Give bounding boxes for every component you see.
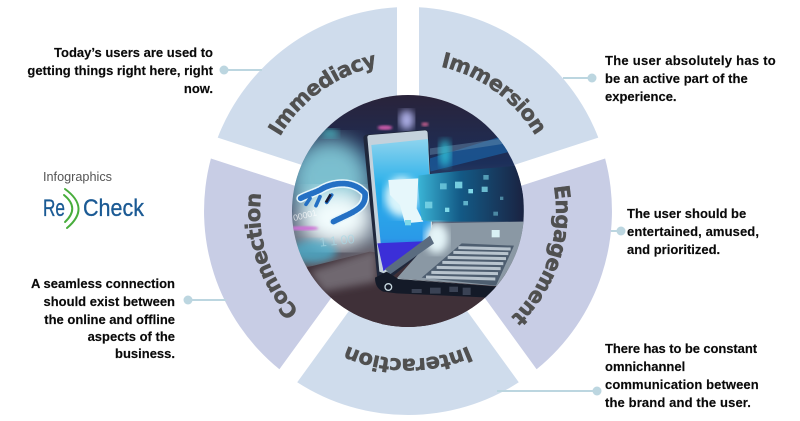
logo wordmark: Check xyxy=(83,195,145,222)
text: Connection description: business. xyxy=(115,346,175,361)
text: Immediacy description: Today’s users are used to xyxy=(54,45,213,60)
logo wordmark xyxy=(43,195,145,222)
text: Connection description: the online and offline xyxy=(44,312,175,327)
segment label: Immediacy: Immediacy xyxy=(268,54,374,136)
panel: Connection xyxy=(204,158,331,370)
segment label: Engagement: Engagement xyxy=(511,186,571,326)
logo signal arcs xyxy=(64,189,79,228)
connector: Engagement xyxy=(611,226,626,236)
segment: Interaction xyxy=(297,311,519,415)
text: Engagement description: The user should be xyxy=(627,206,746,221)
binary digits: 00001 xyxy=(292,207,318,223)
arm reaching out of the screen xyxy=(418,165,523,222)
segment label: Immersion: Immersion xyxy=(442,52,544,135)
text: Interaction description: omnichannel xyxy=(605,359,685,374)
panel: Immediacy xyxy=(218,7,397,165)
text: Interaction description: There has to be constant xyxy=(605,341,758,356)
segment label: Connection: Connection xyxy=(244,194,296,318)
laptop lid xyxy=(363,130,434,278)
text: Engagement description: and prioritized. xyxy=(627,242,720,257)
connector: Immediacy xyxy=(220,66,262,74)
text: Engagement description: entertained, amused, xyxy=(627,224,759,239)
logo caption: Infographics xyxy=(43,170,112,184)
text: Immersion description: experience. xyxy=(605,89,677,104)
robotic hand xyxy=(301,184,365,222)
panel: Interaction xyxy=(297,311,519,415)
connector: Immersion xyxy=(563,74,596,82)
segment label: Interaction: Interaction xyxy=(345,346,473,372)
connector: Connection xyxy=(184,296,226,304)
segment: Connection xyxy=(204,158,331,369)
text: Connection description: should exist between xyxy=(44,294,175,309)
panel: Immersion xyxy=(419,7,598,165)
segment: Engagement xyxy=(485,158,612,369)
text: Immersion description: be an active part of the xyxy=(605,71,748,86)
laptop base and keyboard xyxy=(397,222,523,287)
central image: laptop with robotic hand xyxy=(288,92,530,332)
text: Interaction description: the brand and the user. xyxy=(605,395,751,410)
panel: Engagement xyxy=(485,158,612,370)
text: Connection description: aspects of the xyxy=(88,329,175,344)
table surface xyxy=(306,252,507,327)
text: Immediacy description: getting things right here, right xyxy=(27,63,214,78)
logo wordmark: Re xyxy=(43,195,65,222)
central image: laptop with robotic hand: 1 1 00 xyxy=(319,232,355,250)
text: Interaction description: communication between xyxy=(605,377,759,392)
text: Immersion description: The user absolutely has to xyxy=(605,53,776,68)
text: Immediacy description: now. xyxy=(184,81,213,96)
logo: Infographics ReCheck xyxy=(43,170,145,228)
segment: Immersion xyxy=(419,7,598,165)
connector: Interaction xyxy=(497,386,602,396)
text: Connection description: A seamless connection xyxy=(31,276,175,291)
segment: Immediacy xyxy=(218,7,397,165)
